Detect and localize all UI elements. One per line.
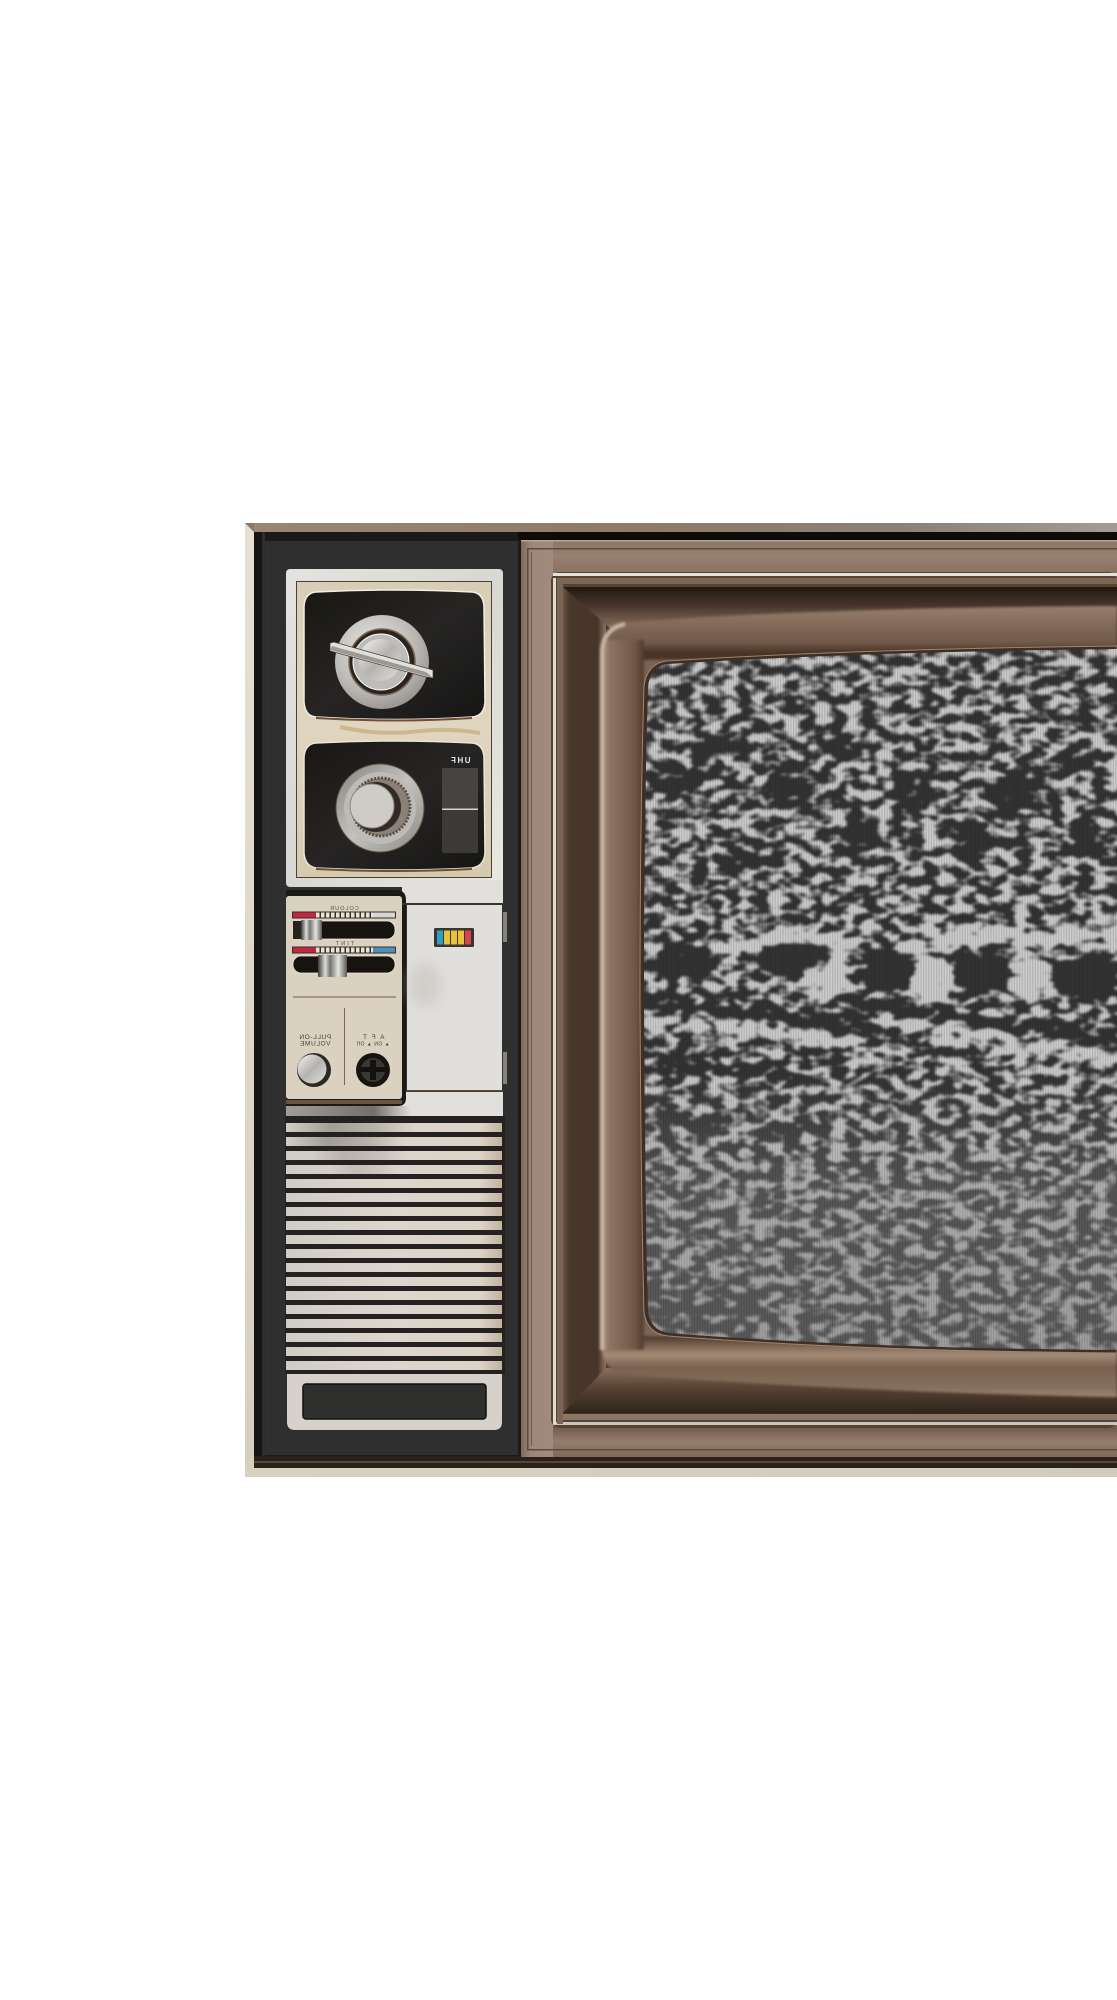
television [245,523,1117,1477]
volume knob [297,1053,331,1087]
pull-on volume label [299,1034,331,1048]
tint slider [293,955,395,977]
tuning knob [336,764,424,852]
lower metal strip [286,1092,503,1116]
lower softer field [630,1150,1117,1360]
bezel face [596,600,1117,1400]
cabinet outer trim [245,523,1117,1477]
chrome control plate [286,569,503,903]
colour scale [292,912,396,918]
slider control panel [286,890,406,1106]
left control panel [254,532,518,1456]
static screen [630,640,1117,1360]
upper dark patches [653,734,1103,871]
pull-on volume label: VOLUME [299,1040,331,1048]
light arcs around chevrons [700,940,860,960]
selector window 1 [304,590,485,720]
AFT label [356,1034,390,1048]
speaker grille [285,1116,505,1374]
screen lip [640,646,1117,1353]
pull-on volume label: PULL-ON [299,1034,331,1041]
bottom fade [645,1099,1117,1350]
colour slider [293,920,395,940]
name plate [287,1374,502,1430]
selector window 2 [304,741,485,871]
UHF buttons [442,768,478,853]
tint label: TINT [334,941,354,947]
picture tube frame [518,532,1117,1457]
AFT label: A F T [362,1034,384,1041]
bright chevrons [805,956,1047,1004]
AFT socket [356,1053,390,1087]
diagonal streaks [645,1000,1117,1132]
colour badge [434,928,474,947]
channel knob [330,615,433,709]
colour label: COLOUR [329,906,359,912]
scan lines [640,640,1117,1360]
recessed well [563,587,1117,1414]
dark chevron blobs [652,946,1116,998]
chrome trim [551,572,1117,1428]
metal plate with colour badge [402,903,507,1092]
UHF label: UHF [450,756,470,765]
AFT label: ▲ ON ▲ Off [356,1042,390,1048]
tint scale [292,946,396,954]
